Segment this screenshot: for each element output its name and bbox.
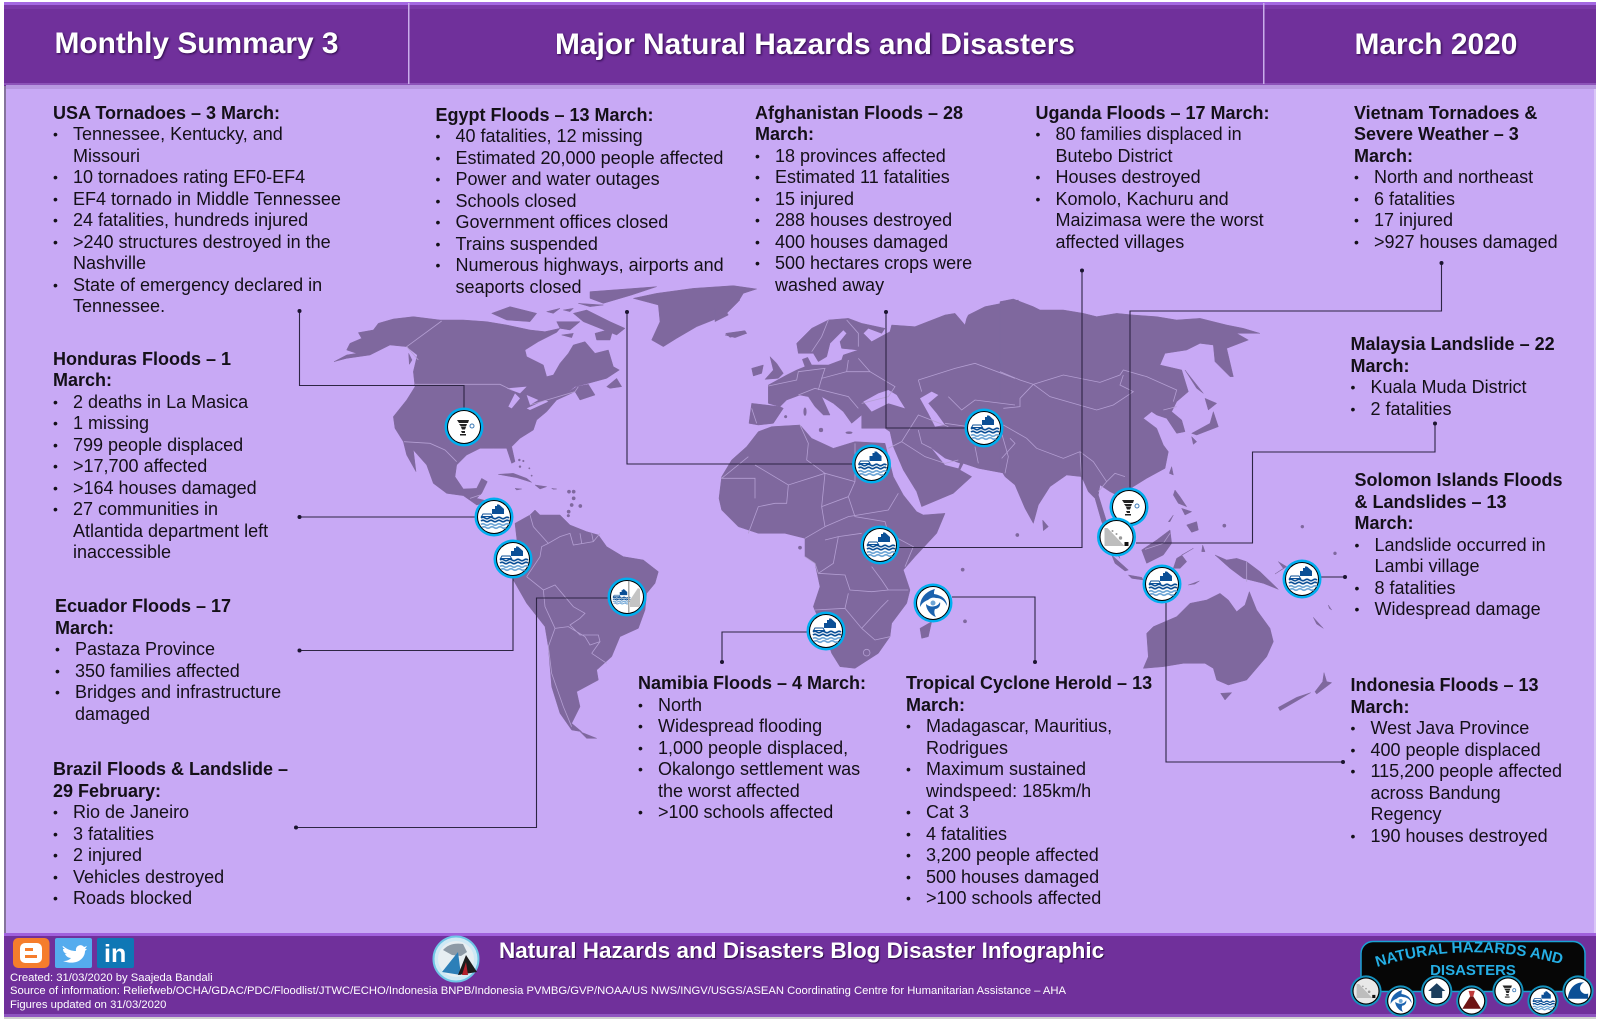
text block: Ecuador Floods: 350 families affected [75, 661, 240, 681]
connector: Honduras floods [300, 516, 475, 518]
icon: Honduras flood [474, 498, 514, 536]
text block: USA Tornadoes: Tennessee, Kentucky, and [73, 124, 283, 144]
icon: USA tornado [444, 408, 484, 446]
text block: Malaysia Landslide: 2 fatalities [1370, 399, 1452, 419]
text block: Namibia Floods: 1,000 people displaced, [658, 738, 848, 758]
text block: Egypt Floods: Power and water outages [456, 169, 660, 189]
connector: Namibia floods [722, 632, 807, 662]
text block: Egypt Floods: Estimated 20,000 people affected [456, 148, 723, 168]
text block: Solomon Islands Floods: Lambi village [1374, 556, 1480, 576]
text block: Honduras Floods [53, 348, 268, 562]
connector end dots [294, 261, 1444, 830]
text block: Afghanistan Floods: Estimated 11 fatalities [775, 167, 950, 187]
text block: Tropical Cyclone Herold: 3,200 people affected [926, 845, 1099, 865]
text block: Indonesia Floods: across Bandung [1370, 783, 1501, 803]
text block: Solomon Islands Floods [1354, 470, 1563, 619]
text block: Tropical Cyclone Herold: Rodrigues [926, 738, 1008, 758]
text block: Namibia Floods: Okalongo settlement was [658, 759, 860, 779]
text block: Solomon Islands Floods: Widespread damage [1374, 599, 1541, 619]
world map [334, 286, 1336, 738]
text block: Tropical Cyclone Herold: windspeed: 185km/h [926, 781, 1091, 801]
connector: USA tornadoes [300, 311, 464, 408]
text block: Egypt Floods: Numerous highways, airports and [456, 255, 724, 275]
text block: Uganda Floods [1036, 102, 1270, 252]
icon: Indonesia flood [1142, 564, 1182, 604]
icon: Egypt flood [852, 444, 891, 484]
text block: Tropical Cyclone Herold: 500 houses damaged [926, 867, 1099, 887]
text block: Indonesia Floods: Indonesia Floods – 13 [1350, 675, 1539, 695]
text block: Honduras Floods: March: [53, 370, 112, 390]
text block: Brazil Floods and Landslide [53, 759, 288, 908]
icon: Namibia flood [806, 612, 846, 650]
footer band [4, 933, 1596, 1019]
text block: Vietnam Tornadoes: >927 houses damaged [1374, 232, 1558, 252]
text block: Solomon Islands Floods: Landslide occurred in [1374, 535, 1546, 555]
text block: Uganda Floods: Maizimasa were the worst [1056, 210, 1264, 230]
text block: Ecuador Floods: March: [55, 618, 114, 638]
map: South America [513, 510, 658, 738]
text block: Ecuador Floods: Bridges and infrastructure [75, 682, 281, 702]
connector: Vietnam tornadoes [1130, 263, 1442, 488]
connector: Afghanistan floods [886, 312, 966, 428]
text block: Namibia Floods: North [658, 695, 702, 715]
text block: Vietnam Tornadoes: Severe Weather – 3 [1354, 124, 1519, 144]
text block: Indonesia Floods: 115,200 people affected [1370, 761, 1562, 781]
text block: Ecuador Floods: Pastaza Province [75, 639, 215, 659]
text block: Vietnam Tornadoes: Vietnam Tornadoes & [1354, 102, 1537, 122]
text block: Egypt Floods: seaports closed [456, 277, 582, 297]
footer: update date: Figures updated on 31/03/2020 [10, 999, 166, 1011]
text block: Vietnam Tornadoes: March: [1354, 146, 1413, 166]
text block: Brazil Floods and Landslide: Brazil Floods & Landslide – [53, 759, 288, 779]
text block: Egypt Floods: Trains suspended [456, 234, 598, 254]
text block: Uganda Floods: Uganda Floods – 17 March: [1036, 102, 1270, 122]
text block: Afghanistan Floods [755, 102, 972, 295]
text block: Afghanistan Floods: washed away [775, 275, 884, 295]
text block: Uganda Floods: Butebo District [1056, 146, 1173, 166]
text block: Vietnam Tornadoes: North and northeast [1374, 167, 1533, 187]
logo badge: Natural Hazards and Disasters: NATURAL HAZARDS AND [1375, 942, 1562, 967]
connector: Malaysia landslide [1136, 424, 1435, 543]
text block: Brazil Floods and Landslide: 3 fatalities [73, 824, 154, 844]
text block: Ecuador Floods: Ecuador Floods – 17 [55, 596, 231, 616]
text block: Afghanistan Floods: March: [755, 124, 814, 144]
connector: Egypt floods [627, 312, 852, 464]
text block: Honduras Floods: >17,700 affected [73, 456, 207, 476]
text block: USA Tornadoes: USA Tornadoes – 3 March: [53, 102, 280, 122]
text block: Honduras Floods: Honduras Floods – 1 [53, 348, 231, 368]
footer: created credit: Created: 31/03/2020 by Saajeda Bandali [10, 972, 213, 984]
text block: Honduras Floods: 2 deaths in La Masica [73, 392, 248, 412]
title: Major Natural Hazards and Disasters: Major Natural Hazards and Disasters [555, 28, 1075, 60]
text block: Ecuador Floods [55, 596, 281, 724]
connector: Ecuador floods [300, 578, 513, 650]
text block: Uganda Floods: Komolo, Kachuru and [1056, 189, 1229, 209]
text block: Tropical Cyclone Herold: Cat 3 [926, 802, 969, 822]
text block: Malaysia Landslide: Malaysia Landslide – 22 [1350, 334, 1555, 354]
text block: Uganda Floods: affected villages [1056, 232, 1184, 252]
map: Europe, Africa and Middle East [715, 300, 1018, 668]
connector: Indonesia floods [1166, 603, 1343, 762]
text block: USA Tornadoes: Nashville [73, 253, 146, 273]
text block: Tropical Cyclone Herold: March: [906, 695, 965, 715]
text block: USA Tornadoes [53, 102, 341, 316]
text block: Tropical Cyclone Herold: 4 fatalities [926, 824, 1007, 844]
connector: Solomon Islands floods [1321, 576, 1345, 578]
text block: USA Tornadoes: Missouri [73, 146, 140, 166]
icon: Twitter [55, 938, 92, 968]
text block: Honduras Floods: >164 houses damaged [73, 478, 257, 498]
text block: Namibia Floods [638, 673, 866, 822]
text block: Honduras Floods: 1 missing [73, 413, 149, 433]
connector: Uganda floods [899, 270, 1082, 548]
text block: Honduras Floods: inaccessible [73, 542, 171, 562]
text block: Tropical Cyclone Herold: Maximum sustained [926, 759, 1086, 779]
text block: Egypt Floods: Government offices closed [456, 212, 668, 232]
text block: Namibia Floods: Namibia Floods – 4 March: [638, 673, 866, 693]
text block: Tropical Cyclone Herold: Tropical Cyclone Herold – 13 [906, 673, 1152, 693]
text block: Indonesia Floods: West Java Province [1370, 718, 1529, 738]
text block: Brazil Floods and Landslide: Vehicles destroyed [73, 867, 224, 887]
icon: Ecuador flood [494, 540, 532, 578]
text block: Afghanistan Floods: 288 houses destroyed [775, 210, 952, 230]
connector: cyclone [952, 597, 1035, 662]
text block: USA Tornadoes: Tennessee. [73, 296, 165, 316]
text block: Brazil Floods and Landslide: Rio de Janeiro [73, 802, 189, 822]
text block: Brazil Floods and Landslide: 29 February: [53, 781, 161, 801]
header band [4, 2, 1596, 89]
text block: Solomon Islands Floods: March: [1354, 513, 1414, 533]
icon: tropical cyclone [914, 584, 952, 622]
footer title: Natural Hazards and Disasters Blog Disaster Infographic [499, 938, 1104, 963]
text block: Vietnam Tornadoes: 17 injured [1374, 210, 1453, 230]
map: country borders [404, 320, 1247, 727]
text block: Indonesia Floods: 190 houses destroyed [1370, 826, 1548, 846]
text block: Solomon Islands Floods: 8 fatalities [1374, 578, 1456, 598]
map: Maritime Asia and Oceania [1112, 525, 1336, 711]
text block: Afghanistan Floods: 15 injured [775, 189, 854, 209]
text block: Brazil Floods and Landslide: 2 injured [73, 845, 142, 865]
text block: Egypt Floods: 40 fatalities, 12 missing [456, 126, 643, 146]
logo badge: Natural Hazards and Disasters [1350, 940, 1594, 1017]
text block: Afghanistan Floods: Afghanistan Floods – 28 [755, 102, 963, 122]
text block: Indonesia Floods: 400 people displaced [1370, 740, 1541, 760]
text block: Honduras Floods: 27 communities in [73, 499, 218, 519]
connector lines [296, 263, 1442, 828]
text block: Malaysia Landslide [1350, 334, 1555, 419]
text block: Uganda Floods: Houses destroyed [1056, 167, 1201, 187]
title: Monthly Summary 3: Monthly Summary 3 [54, 26, 339, 60]
text block: Honduras Floods: 799 people displaced [73, 435, 243, 455]
icon: blog logo [434, 936, 478, 982]
text block: Afghanistan Floods: 400 houses damaged [775, 232, 948, 252]
text block: Vietnam Tornadoes: 6 fatalities [1374, 189, 1455, 209]
text block: Indonesia Floods: March: [1350, 697, 1410, 717]
text block: Indonesia Floods [1350, 675, 1562, 846]
text block: Afghanistan Floods: 500 hectares crops were [775, 253, 972, 273]
footer: sources: Source of information: Reliefweb/OCHA/GDAC/PDC/Floodlist/JTWC/ECHO/Indonesia BNPB/Indonesia PVMBG/GVP/NOAA/US NWS/INGV/USGS/ASEAN Coordinating Centre for Humanitarian Assistance – AHA [10, 985, 1066, 997]
text block: Solomon Islands Floods: & Landslides – 13 [1354, 492, 1507, 512]
text block: Egypt Floods: Schools closed [456, 191, 577, 211]
text block: Egypt Floods [436, 104, 724, 297]
icon: Blogger [13, 938, 50, 968]
text block: Honduras Floods: Atlantida department left [73, 521, 268, 541]
text block: Indonesia Floods: Regency [1370, 804, 1442, 824]
map: North America and Greenland [334, 286, 757, 517]
text block: Malaysia Landslide: March: [1350, 356, 1410, 376]
icon: LinkedIn: in [104, 940, 126, 968]
icon: Malaysia landslide [1097, 518, 1136, 556]
text block: Namibia Floods: Widespread flooding [658, 716, 822, 736]
text block: Tropical Cyclone Herold: Madagascar, Mauritius, [926, 716, 1112, 736]
text block: USA Tornadoes: 10 tornadoes rating EF0-EF4 [73, 167, 305, 187]
icon: Solomon Islands flood [1282, 560, 1322, 598]
text block: Uganda Floods: 80 families displaced in [1056, 124, 1242, 144]
text block: Namibia Floods: the worst affected [658, 781, 800, 801]
title: March 2020: March 2020 [1354, 28, 1517, 60]
map: East and South Asia [1000, 299, 1260, 558]
icon: LinkedIn [97, 938, 134, 968]
logo badge: Natural Hazards and Disasters: DISASTERS [1430, 962, 1516, 979]
text block: Solomon Islands Floods: Solomon Islands Floods [1354, 470, 1563, 490]
text block: Brazil Floods and Landslide: Roads blocked [73, 888, 192, 908]
text block: Namibia Floods: >100 schools affected [658, 802, 833, 822]
text block: USA Tornadoes: >240 structures destroyed in the [73, 232, 331, 252]
text block: Vietnam Tornadoes [1354, 102, 1558, 252]
text block: Egypt Floods: Egypt Floods – 13 March: [436, 104, 654, 124]
icon: Afghanistan flood [964, 408, 1004, 448]
text block: Tropical Cyclone Herold [906, 673, 1152, 908]
icon: Brazil flood and landslide [608, 578, 646, 616]
text block: USA Tornadoes: EF4 tornado in Middle Tennessee [73, 189, 341, 209]
text block: Malaysia Landslide: Kuala Muda District [1370, 377, 1527, 397]
text block: USA Tornadoes: 24 fatalities, hundreds injured [73, 210, 308, 230]
text block: USA Tornadoes: State of emergency declared in [73, 275, 322, 295]
text block: Tropical Cyclone Herold: >100 schools affected [926, 888, 1101, 908]
icon: Uganda flood [860, 526, 900, 564]
connector: Brazil floods [296, 598, 609, 828]
icon: Vietnam tornado [1110, 488, 1148, 526]
text block: Afghanistan Floods: 18 provinces affected [775, 146, 946, 166]
text block: Ecuador Floods: damaged [75, 704, 150, 724]
